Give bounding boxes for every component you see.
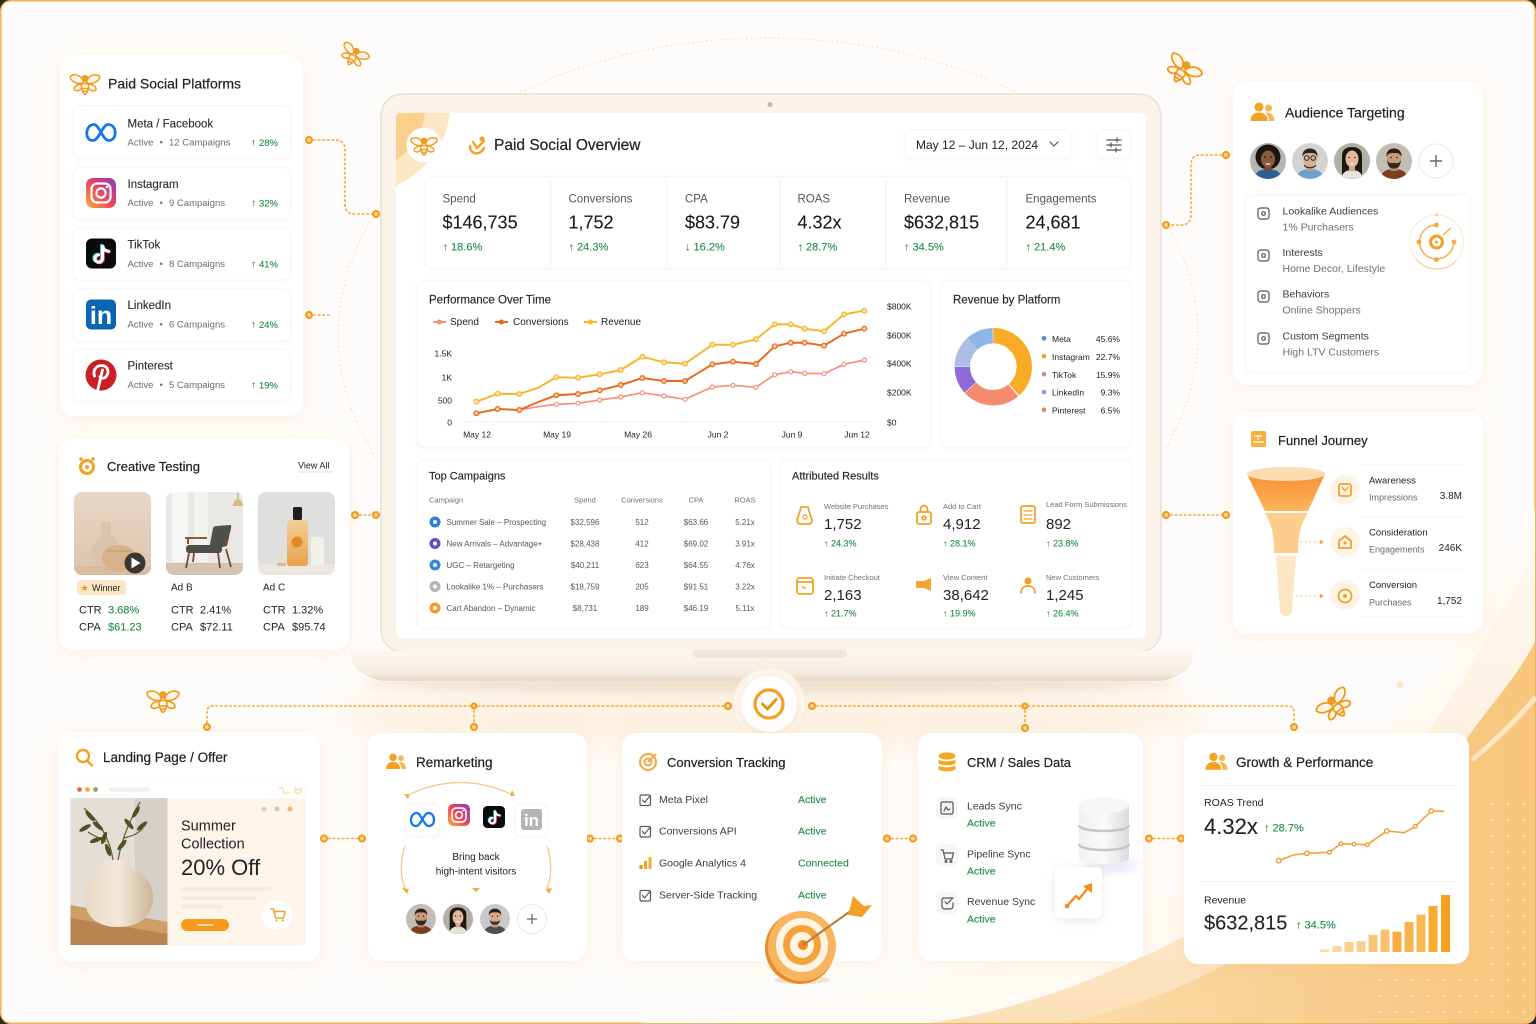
ad B stats: [171, 583, 233, 634]
funnel stage: conversion: [1330, 580, 1464, 617]
KPI: spend: [442, 194, 518, 254]
sync row: pipeline: [936, 844, 1031, 878]
campaign rows: 623: [635, 561, 649, 570]
targeting orbit graphic: [1410, 214, 1464, 269]
result: new customers: ↑ 26.4%: [1046, 609, 1079, 619]
KPI: engagements: Engagements: [1026, 194, 1097, 206]
platform: Instagram: 9 Campaigns: [169, 198, 225, 209]
line chart: 500: [438, 396, 452, 406]
line chart: Jun 9: [782, 430, 803, 440]
panel: CRM / sales data: [918, 733, 1143, 961]
panel: attributed results: Attributed Results: [792, 471, 879, 483]
platform: TikTok: •: [160, 259, 163, 270]
tracking row: Meta Pixel: Active: [798, 794, 827, 806]
sync row: leads: [936, 797, 1022, 830]
result: lead form submissions: [1021, 500, 1127, 549]
icon: search: [77, 750, 92, 766]
campaign rows: $91.51: [684, 583, 709, 592]
campaign rows: 412: [635, 540, 649, 549]
campaign rows: $28,438: [571, 540, 600, 549]
donut legend: 45.6%: [1096, 334, 1120, 344]
funnel stage: consideration: Consideration: [1369, 528, 1428, 539]
ad C stats: CTR: [263, 605, 286, 617]
sync row: revenue: Active: [967, 914, 996, 926]
line chart: $800K: [887, 302, 912, 312]
icon: funnel journey: [1251, 431, 1266, 447]
ad C stats: CPA: [263, 622, 285, 634]
donut legend: LinkedIn: [1052, 388, 1084, 398]
tracking row: Conversions API: [640, 826, 827, 838]
result: lead form submissions: Lead Form Submissions: [1046, 500, 1127, 509]
audience options card: [1246, 195, 1470, 372]
campaign rows: 3.91x: [735, 540, 755, 549]
connectors: [204, 137, 1297, 842]
chart legend: Spend: [450, 317, 479, 328]
heading: creative testing: Creative Testing: [107, 459, 200, 474]
result: add to cart: 4,912: [943, 516, 981, 533]
ad B stats: $72.11: [200, 622, 233, 634]
filter button: [1097, 130, 1130, 158]
KPI: conversions: Conversions: [568, 194, 633, 206]
date range selector: [905, 130, 1071, 158]
funnel stage: awareness: 3.8M: [1440, 491, 1462, 502]
campaign rows: Summer Sale – Prospecting: [446, 518, 546, 527]
platform: TikTok: Active: [128, 259, 153, 270]
sync row: revenue: Revenue Sync: [967, 896, 1035, 908]
result: website purchases: [797, 502, 889, 549]
donut legend: Instagram: [1052, 352, 1090, 362]
panel: revenue by platform: [941, 281, 1131, 447]
tracking row: Conversions API: Conversions API: [659, 826, 737, 838]
line chart: Jun 12: [844, 430, 870, 440]
decorative bee top right: [1160, 52, 1203, 92]
revenue block: [1204, 895, 1450, 952]
decorative bee bottom left: [147, 691, 179, 712]
platform: LinkedIn: ↑ 24%: [251, 320, 279, 331]
cart button: [262, 900, 292, 930]
heading: growth: Growth & Performance: [1236, 755, 1373, 770]
campaign rows: 4.76x: [735, 561, 755, 570]
heading: audience targeting: Audience Targeting: [1285, 105, 1405, 121]
funnel graphic: [1247, 467, 1325, 616]
panel: top campaigns: Top Campaigns: [429, 471, 506, 483]
platform: TikTok: 8 Campaigns: [169, 259, 225, 270]
revenue block: Revenue: [1204, 895, 1246, 907]
audience options card: 1% Purchasers: [1282, 222, 1354, 234]
donut chart: [962, 336, 1024, 398]
donut legend: Meta: [1052, 334, 1071, 344]
tracking row: Meta Pixel: Meta Pixel: [659, 794, 708, 806]
funnel stage: awareness: Awareness: [1369, 476, 1416, 487]
result: lead form submissions: ↑ 23.8%: [1046, 539, 1079, 549]
sync row: pipeline: Pipeline Sync: [967, 849, 1031, 861]
ad C stats: [263, 583, 326, 634]
remarketing caption: high-intent visitors: [436, 867, 516, 878]
campaign rows: $32,596: [571, 518, 600, 527]
campaign rows: $63.66: [684, 518, 709, 527]
platform: Meta: •: [160, 138, 163, 149]
tracking row: server-side: [640, 890, 827, 902]
icon: database: [938, 752, 956, 771]
database illustration: [1079, 797, 1138, 871]
line chart: $0: [887, 418, 897, 428]
date range selector: May 12 – Jun 12, 2024: [916, 138, 1038, 152]
ad B stats: CPA: [171, 622, 193, 634]
platform: Instagram: [73, 167, 290, 219]
funnel arrows: [1296, 540, 1324, 598]
panel: growth and performance: [1184, 733, 1469, 964]
heading: CRM: CRM / Sales Data: [967, 755, 1072, 770]
result: new customers: 1,245: [1046, 587, 1084, 604]
offer copy: 20% Off: [181, 855, 261, 880]
result: initiate checkout: ↑ 21.7%: [824, 609, 857, 619]
campaign rows: $18,759: [571, 583, 600, 592]
icon: people: [386, 754, 406, 769]
audience options card: Home Decor, Lifestyle: [1282, 263, 1385, 275]
donut legend: 22.7%: [1096, 352, 1120, 362]
campaigns table header: Spend: [574, 496, 596, 505]
platform: Instagram: ↑ 32%: [251, 198, 279, 209]
KPI: engagements: ↑ 21.4%: [1026, 242, 1065, 254]
campaign rows: $40,211: [571, 561, 600, 570]
KPI: ROAS: [798, 194, 842, 254]
ad C stats: Ad C: [263, 583, 285, 594]
KPI: CPA: CPA: [685, 194, 708, 206]
campaign rows: 5.21x: [735, 518, 755, 527]
heading: landing page: Landing Page / Offer: [103, 750, 228, 765]
icon: bee: [70, 75, 100, 95]
KPI: revenue: ↑ 34.5%: [904, 242, 944, 254]
result: initiate checkout: 2,163: [824, 587, 862, 604]
funnel stage: conversion: Conversion: [1369, 580, 1417, 591]
campaign rows: Cart Abandon – Dynamic: [446, 604, 535, 613]
funnel stage: awareness: [1330, 465, 1464, 517]
platform: Meta: [73, 106, 290, 158]
panel: paid social platforms: [60, 55, 303, 416]
result: add to cart: [917, 502, 982, 549]
result: new customers: New Customers: [1046, 573, 1100, 582]
line chart: $200K: [887, 388, 912, 398]
KPI: ROAS: ROAS: [798, 194, 830, 206]
donut legend: Pinterest: [1052, 405, 1086, 415]
ad B stats: 2.41%: [200, 605, 231, 617]
target with arrow: [765, 896, 872, 984]
tracking row: Google Analytics: [640, 857, 849, 870]
dashboard logo: [406, 128, 442, 162]
offer copy: [181, 806, 292, 908]
heading: conversion tracking: Conversion Tracking: [667, 755, 786, 770]
KPI: spend: ↑ 18.6%: [442, 242, 482, 254]
line chart: $600K: [887, 331, 912, 341]
heading: platforms: Paid Social Platforms: [108, 76, 241, 92]
KPI: spend: $146,735: [442, 213, 518, 233]
KPI: engagements: 24,681: [1026, 213, 1081, 233]
offer copy: Summer: [181, 819, 236, 835]
donut legend: TikTok: [1052, 370, 1077, 380]
result: view content: 38,642: [943, 587, 989, 604]
line chart: 1.5K: [434, 349, 452, 359]
campaign rows: 512: [635, 518, 649, 527]
donut legend: [1042, 334, 1120, 415]
remarketing caption: Bring back: [452, 852, 501, 863]
platform: LinkedIn: •: [160, 320, 163, 331]
audience options card: Interests: [1282, 247, 1323, 259]
ROAS trend block: ↑ 28.7%: [1264, 823, 1304, 835]
badge: winner: [77, 580, 126, 595]
sync row: leads: Leads Sync: [967, 801, 1022, 813]
KPI: conversions: [568, 194, 633, 254]
campaign rows: 3.22x: [735, 583, 755, 592]
ad C stats: $95.74: [292, 622, 326, 634]
platform: LinkedIn: [73, 289, 290, 341]
campaigns table header: CPA: [689, 496, 703, 505]
KPI: CPA: [685, 194, 740, 254]
sync row: pipeline: Active: [967, 866, 996, 878]
heading: funnel journey: Funnel Journey: [1278, 433, 1368, 448]
revenue block: ↑ 34.5%: [1296, 920, 1336, 932]
heading: remarketing: Remarketing: [416, 755, 493, 770]
platform: Instagram: Active: [128, 198, 153, 209]
panel: conversion tracking: [622, 733, 882, 984]
chart legend: Revenue: [601, 317, 641, 328]
audience options card: Behaviors: [1282, 289, 1329, 301]
KPI: revenue: Revenue: [904, 194, 950, 206]
platform: Pinterest: 5 Campaigns: [169, 380, 225, 391]
KPI: revenue: $632,815: [904, 213, 979, 233]
link: view all: View All: [298, 461, 329, 471]
panel: performance over time: Performance Over Time: [429, 295, 551, 307]
audience options card: Custom Segments: [1282, 331, 1369, 343]
ad thumbnail C: [258, 492, 335, 575]
sync row: revenue: [936, 892, 1035, 926]
result: add to cart: Add to Cart: [943, 502, 982, 511]
campaign rows: 5.11x: [736, 604, 754, 613]
result: website purchases: ↑ 24.3%: [824, 539, 857, 549]
platform: Pinterest: •: [160, 380, 163, 391]
conversion check badge: [733, 668, 805, 740]
icon: creative testing: [79, 457, 95, 474]
tracking row: Conversions API: Active: [798, 826, 827, 838]
audience options card: High LTV Customers: [1282, 347, 1379, 359]
revenue block: $632,815: [1204, 913, 1287, 935]
result: lead form submissions: 892: [1046, 516, 1071, 533]
KPI: CPA: ↓ 16.2%: [685, 242, 725, 254]
line chart: May 26: [624, 430, 652, 440]
platform: Meta: Active: [128, 138, 153, 149]
icon: audience: [1250, 102, 1274, 121]
ad A stats: $61.23: [108, 622, 142, 634]
browser mockup: [70, 780, 305, 945]
platform: TikTok: [73, 228, 290, 280]
tracking row: Google Analytics: Connected: [798, 858, 849, 870]
badge: winner: Winner: [92, 583, 121, 593]
chart legend: Conversions: [513, 317, 569, 328]
line chart: [434, 302, 912, 440]
line chart: May 12: [463, 430, 491, 440]
ad B stats: Ad B: [171, 583, 193, 594]
KPI: conversions: ↑ 24.3%: [568, 242, 608, 254]
panel: performance over time: [417, 281, 930, 447]
campaign rows: 189: [635, 604, 649, 613]
ad A stats: CPA: [79, 622, 101, 634]
KPI: ROAS: 4.32x: [798, 213, 842, 233]
campaigns table header: Campaign: [429, 496, 463, 505]
result: website purchases: 1,752: [824, 516, 862, 533]
campaign rows: UGC – Retargeting: [446, 561, 515, 570]
platform: Pinterest: Active: [128, 380, 153, 391]
ad A stats: 3.68%: [108, 605, 139, 617]
campaign rows: $69.02: [684, 540, 709, 549]
funnel stage: awareness: Impressions: [1369, 493, 1418, 503]
donut legend: 15.9%: [1096, 370, 1120, 380]
campaign rows: 205: [635, 583, 649, 592]
panel: audience targeting: [1233, 82, 1483, 385]
platform: LinkedIn: LinkedIn: [128, 300, 171, 312]
decorative bee top left: [336, 41, 370, 72]
platform: LinkedIn: in: [90, 302, 112, 330]
result: initiate checkout: [797, 573, 881, 619]
CTA button: [181, 919, 229, 931]
retargeting loop arrows: [401, 782, 552, 894]
panel: revenue by platform: Revenue by Platform: [953, 295, 1060, 307]
product photo: [70, 798, 168, 945]
ad B stats: CTR: [171, 605, 194, 617]
avatars: [1250, 143, 1453, 179]
audience options card: Online Shoppers: [1282, 305, 1361, 317]
ad C stats: 1.32%: [292, 605, 323, 617]
line chart: $400K: [887, 359, 912, 369]
result: new customers: [1021, 573, 1100, 619]
campaign rows: $46.19: [684, 604, 709, 613]
KPI: spend: Spend: [442, 194, 476, 206]
icon: target: [640, 754, 656, 770]
platform: TikTok: TikTok: [128, 240, 161, 252]
laptop: [350, 94, 1194, 692]
tracking row: Google Analytics: Google Analytics 4: [659, 858, 746, 870]
ad thumbnail B: [166, 492, 243, 575]
funnel stage: consideration: 246K: [1439, 543, 1462, 554]
line chart: 0: [447, 418, 452, 428]
campaigns table header: Conversions: [621, 496, 663, 505]
line chart: 1K: [442, 373, 452, 383]
platform: Meta: Meta / Facebook: [128, 119, 213, 131]
result: view content: View Content: [943, 573, 988, 582]
campaign rows: Lookalike 1% – Purchasers: [446, 583, 543, 592]
ad A stats: CTR: [79, 605, 102, 617]
campaigns table header: ROAS: [734, 496, 756, 505]
result: view content: [916, 573, 989, 619]
platform: Meta: 12 Campaigns: [169, 138, 231, 149]
ad A stats: [79, 605, 142, 634]
KPI: revenue: [904, 194, 979, 254]
donut legend: 9.3%: [1101, 388, 1120, 398]
chart legend: [433, 317, 641, 328]
offer copy: Collection: [181, 837, 245, 853]
ROAS trend block: 4.32x: [1204, 814, 1258, 839]
funnel stage: conversion: Purchases: [1369, 598, 1412, 608]
KPI: CPA: $83.79: [685, 213, 740, 233]
revenue bars: [1320, 895, 1450, 952]
panel: creative testing: [59, 439, 349, 650]
campaign rows: New Arrivals – Advantage+: [446, 540, 543, 549]
panel: remarketing: [368, 733, 587, 961]
result: website purchases: Website Purchases: [824, 502, 889, 511]
tracking row: Meta Pixel: [640, 794, 827, 806]
result: initiate checkout: Initiate Checkout: [824, 573, 881, 582]
decorative bee bottom right: [1315, 686, 1358, 727]
KPI: conversions: 1,752: [568, 213, 614, 233]
campaign rows: $8,731: [573, 604, 598, 613]
platform: Instagram: Instagram: [128, 179, 179, 191]
platform: Pinterest: ↑ 19%: [251, 380, 279, 391]
platform: TikTok: ↑ 41%: [251, 259, 279, 270]
dashboard title: Paid Social Overview: [494, 137, 641, 154]
icon: people: [1206, 753, 1228, 770]
panel: funnel journey: [1233, 412, 1483, 634]
audience options card: Lookalike Audiences: [1282, 206, 1378, 218]
platform: Pinterest: Pinterest: [128, 361, 174, 373]
tracking row: server-side: Active: [798, 890, 827, 902]
funnel stage: consideration: [1330, 527, 1464, 570]
platform: LinkedIn: 6 Campaigns: [169, 320, 225, 331]
platform: LinkedIn: Active: [128, 320, 153, 331]
KPI: engagements: [1026, 194, 1097, 254]
line chart: May 19: [543, 430, 571, 440]
growth arrow card: [1055, 867, 1102, 918]
sync row: leads: Active: [967, 818, 996, 830]
campaigns table header: [429, 496, 756, 505]
line chart: Jun 2: [708, 430, 729, 440]
KPI row: [425, 177, 1130, 268]
funnel stage: consideration: Engagements: [1369, 545, 1425, 555]
tracking row: server-side: Server-Side Tracking: [659, 890, 757, 902]
KPI: ROAS: ↑ 28.7%: [798, 242, 837, 254]
panel: attributed results: [781, 460, 1131, 628]
donut legend: 6.5%: [1101, 405, 1120, 415]
platform: Meta: ↑ 28%: [251, 138, 279, 149]
ROAS trend block: [1204, 797, 1444, 863]
platform logos: [406, 804, 548, 836]
platform: Pinterest: [73, 349, 290, 401]
panel: top campaigns: [417, 460, 770, 628]
result: add to cart: ↑ 28.1%: [943, 539, 976, 549]
result: view content: ↑ 19.9%: [943, 609, 976, 619]
funnel stage: conversion: 1,752: [1437, 596, 1462, 607]
ad thumbnail A: [74, 492, 151, 575]
badge: winner: ★: [80, 583, 89, 593]
ROAS trend block: ROAS Trend: [1204, 797, 1264, 809]
platform: Instagram: •: [160, 198, 163, 209]
remarketing avatars: [406, 904, 546, 934]
panel: landing page / offer: [58, 732, 320, 962]
campaign rows: [430, 516, 755, 614]
remarketing caption: [436, 852, 516, 878]
campaign rows: $64.55: [684, 561, 709, 570]
platform logos: in: [524, 811, 539, 830]
